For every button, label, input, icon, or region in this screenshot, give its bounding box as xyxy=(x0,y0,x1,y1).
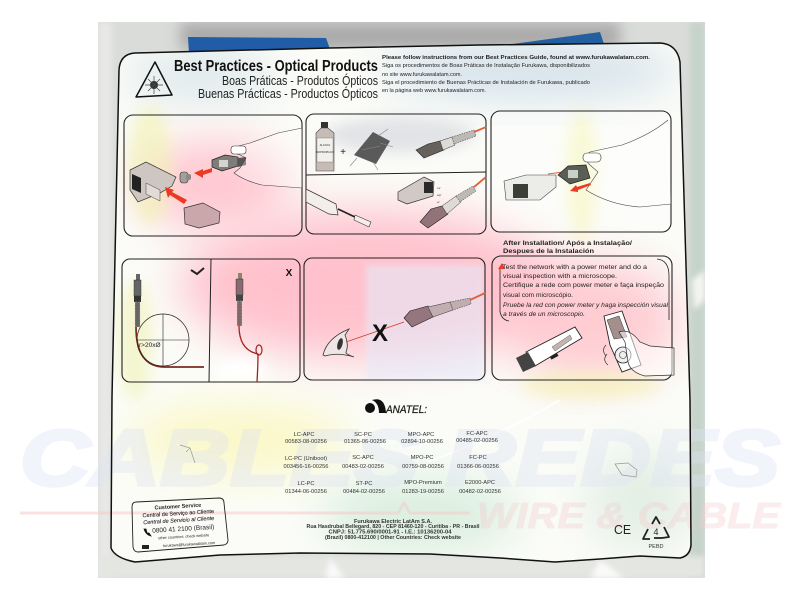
icon: adapter lower: eq/ xyxy=(437,193,441,197)
title: Buenas Prácticas - Productos Ópticos xyxy=(198,86,378,101)
arrow: insertion direction xyxy=(570,183,591,192)
panel: cleaning supplies and connector xyxy=(306,114,486,234)
company address: Furukawa Electric LatAm S.A. xyxy=(354,519,433,525)
icon: recycling 4 PEBD xyxy=(643,517,669,550)
panel: after installation inspection xyxy=(492,256,674,380)
instructions text: Please follow instructions from our Best Practices Guide, found at www.furukawalatam.com. xyxy=(382,55,650,61)
icon: check mark xyxy=(191,268,204,274)
icon: recycling 4 PEBD: PEBD xyxy=(649,544,664,550)
inspection text: visual com microscópio. xyxy=(503,292,573,299)
fiber: wrong loop xyxy=(239,326,258,382)
note bracket xyxy=(500,259,669,321)
table: Anatel certification codes: ST-PC xyxy=(356,481,372,487)
table: Anatel certification codes: 00759-08-00256 xyxy=(402,464,444,470)
panel: correct and wrong fiber bend xyxy=(122,259,300,382)
table: Anatel certification codes: MPO-Premium xyxy=(404,480,442,486)
icon: prohibition X: X xyxy=(372,320,388,347)
company address: (Brazil) 0800-412100 | Other Countries: Check website xyxy=(325,535,461,541)
icon: connector in hand xyxy=(558,120,671,207)
crease line xyxy=(428,400,560,462)
heading: after installation xyxy=(503,240,632,255)
panel: remove dust caps xyxy=(124,115,302,236)
panel: insert connector into adapter xyxy=(491,111,671,232)
table: Anatel certification codes: FC-PC xyxy=(469,455,487,461)
table: Anatel certification codes: 00483-02-00256 xyxy=(342,464,384,470)
table: Anatel certification codes: FC-APC xyxy=(466,431,488,437)
line: fiber link xyxy=(548,172,563,174)
callout: customer service: Central de Servicio al Cliente xyxy=(143,516,214,526)
instructions text: no site www.furukawalatam.com. xyxy=(382,72,462,78)
plastic bag xyxy=(98,22,705,578)
icon: warning triangle xyxy=(498,263,505,269)
table: Anatel certification codes: MPO-PC xyxy=(411,455,433,461)
label outline xyxy=(111,43,691,562)
table: Anatel certification codes: 00484-02-00256 xyxy=(343,489,385,495)
instructions text: Siga os procedimentos de Boas Práticas de Instalação Furukawa, disponibilizados xyxy=(382,63,590,69)
table: Anatel certification codes: 00482-02-00256 xyxy=(459,489,501,495)
inspection text: visual inspection with a microscope. xyxy=(503,273,617,280)
callout: customer service: furukawa@furukawalatam.com xyxy=(163,541,215,548)
icon: recycling 4 PEBD: 4 xyxy=(653,527,659,537)
watermark: CABLES REDES WIRE AND CABLE: CABLES REDES xyxy=(20,413,780,502)
company address xyxy=(306,519,480,541)
icon: power meter in hand xyxy=(604,311,674,376)
table: Anatel certification codes: 00583-08-00256 xyxy=(285,439,327,445)
heading: after installation: Despues de la Instalación xyxy=(503,248,594,255)
icon: alcohol bottle: ALCOOL xyxy=(320,143,331,147)
icon: adapter lower: m/ xyxy=(437,186,440,190)
heading: after installation: After Installation/ Após a Instalação/ xyxy=(503,240,632,247)
title xyxy=(174,58,378,101)
icon: cleaning pen xyxy=(306,189,371,227)
icon: connector correct xyxy=(134,274,141,327)
inspection text: Certifique a rede com power meter e faça inspeção xyxy=(503,282,664,289)
icon: CE mark: CE xyxy=(614,522,631,537)
table: Anatel certification codes: 01283-19-00256 xyxy=(402,489,444,495)
table: Anatel certification codes: 01365-06-00256 xyxy=(344,439,386,445)
icon: dust cap xyxy=(180,172,191,183)
plus sign: + xyxy=(340,147,346,158)
callout: customer service: other countries: check website xyxy=(158,533,209,540)
table: Anatel certification codes: SC-PC xyxy=(354,432,372,438)
table: Anatel certification codes: 003456-16-00256 xyxy=(284,464,328,470)
callout: customer service: Central de Serviço ao Cliente xyxy=(142,509,214,519)
icon: Anatel logo: ANATEL: xyxy=(385,404,427,416)
icon: SC connector xyxy=(404,293,485,327)
icon: large plug cap xyxy=(184,203,220,228)
table: Anatel certification codes: 00485-02-00256 xyxy=(456,438,498,444)
icon: adapter lower: e/ xyxy=(437,200,440,204)
instructions text xyxy=(382,55,650,94)
table: Anatel certification codes: LC-PC (Uniboot) xyxy=(285,456,327,462)
arrows: red double arrows xyxy=(165,168,212,204)
icon: email xyxy=(142,545,149,549)
watermark: CABLES REDES WIRE AND CABLE xyxy=(20,413,781,536)
icon: wrong mark: X xyxy=(286,268,293,279)
table: Anatel certification codes: E2000-APC xyxy=(465,480,495,486)
table: Anatel certification codes: 01366-06-00256 xyxy=(457,464,499,470)
inspection text xyxy=(502,264,669,318)
inspection text: a través de un microscopio. xyxy=(503,311,585,318)
inspection text: Pruebe la red con power meter y haga inspección visual xyxy=(503,302,669,309)
callout: customer service: 0800 41 2100 (Brasil) xyxy=(152,524,215,535)
icon: cleaning cloth xyxy=(350,129,393,170)
bend radius diagram xyxy=(137,314,189,366)
table: Anatel certification codes: 02894-10-00256 xyxy=(401,439,443,445)
surface scratches xyxy=(180,445,637,477)
panel: do not look into the fiber xyxy=(304,258,485,380)
line: laser beam xyxy=(346,322,404,342)
icon: connector in hand xyxy=(212,128,302,188)
icon: SC connector upper xyxy=(416,127,486,158)
fiber: correct bend xyxy=(136,327,204,367)
table: Anatel certification codes: LC-PC xyxy=(297,481,315,487)
company address: CNPJ: 51.775.690/0001-91 - I.E.: 10136200-04 xyxy=(328,530,452,536)
table: Anatel certification codes xyxy=(284,431,501,495)
label sticker xyxy=(105,40,695,570)
icon: adapter xyxy=(130,162,176,202)
icon: phone xyxy=(144,529,151,536)
icon: SC connector lower xyxy=(420,177,486,228)
icon: alcohol bottle xyxy=(316,122,334,171)
callout: customer service xyxy=(132,498,228,552)
icon: eye xyxy=(323,329,354,357)
table: Anatel certification codes: LC-APC xyxy=(294,432,314,438)
watermark: CABLES REDES WIRE AND CABLE: WIRE & CABLE xyxy=(477,495,781,536)
icon: adapter xyxy=(504,175,556,200)
icon: microscope xyxy=(516,327,582,372)
inspection text: Test the network with a power meter and do a xyxy=(502,264,647,271)
icon: adapter lower xyxy=(398,177,441,204)
icon: laser warning triangle xyxy=(136,62,172,97)
instructions text: en la página web www.furukawalatam.com. xyxy=(382,88,486,94)
icon: Anatel logo xyxy=(365,399,427,416)
company address: Rua Hasdrubal Bellegard, 820 - CEP 81460-120 - Curitiba - PR - Brasil xyxy=(306,524,480,530)
title: Boas Práticas - Produtos Ópticos xyxy=(222,73,378,88)
icon: connector wrong xyxy=(236,273,243,326)
callout: customer service: Customer Service xyxy=(154,503,201,512)
bend radius diagram: r>20xØ xyxy=(139,342,160,349)
icon: alcohol bottle: ISOPROPILICO xyxy=(316,150,334,154)
instructions text: Siga el procedimiento de Buenas Prácticas de Instalación de Furukawa, publicado xyxy=(382,80,590,86)
table: Anatel certification codes: 01344-06-00256 xyxy=(285,489,327,495)
table: Anatel certification codes: SC-APC xyxy=(352,455,374,461)
title: Best Practices - Optical Products xyxy=(174,58,378,75)
table: Anatel certification codes: MPO-APC xyxy=(408,432,434,438)
